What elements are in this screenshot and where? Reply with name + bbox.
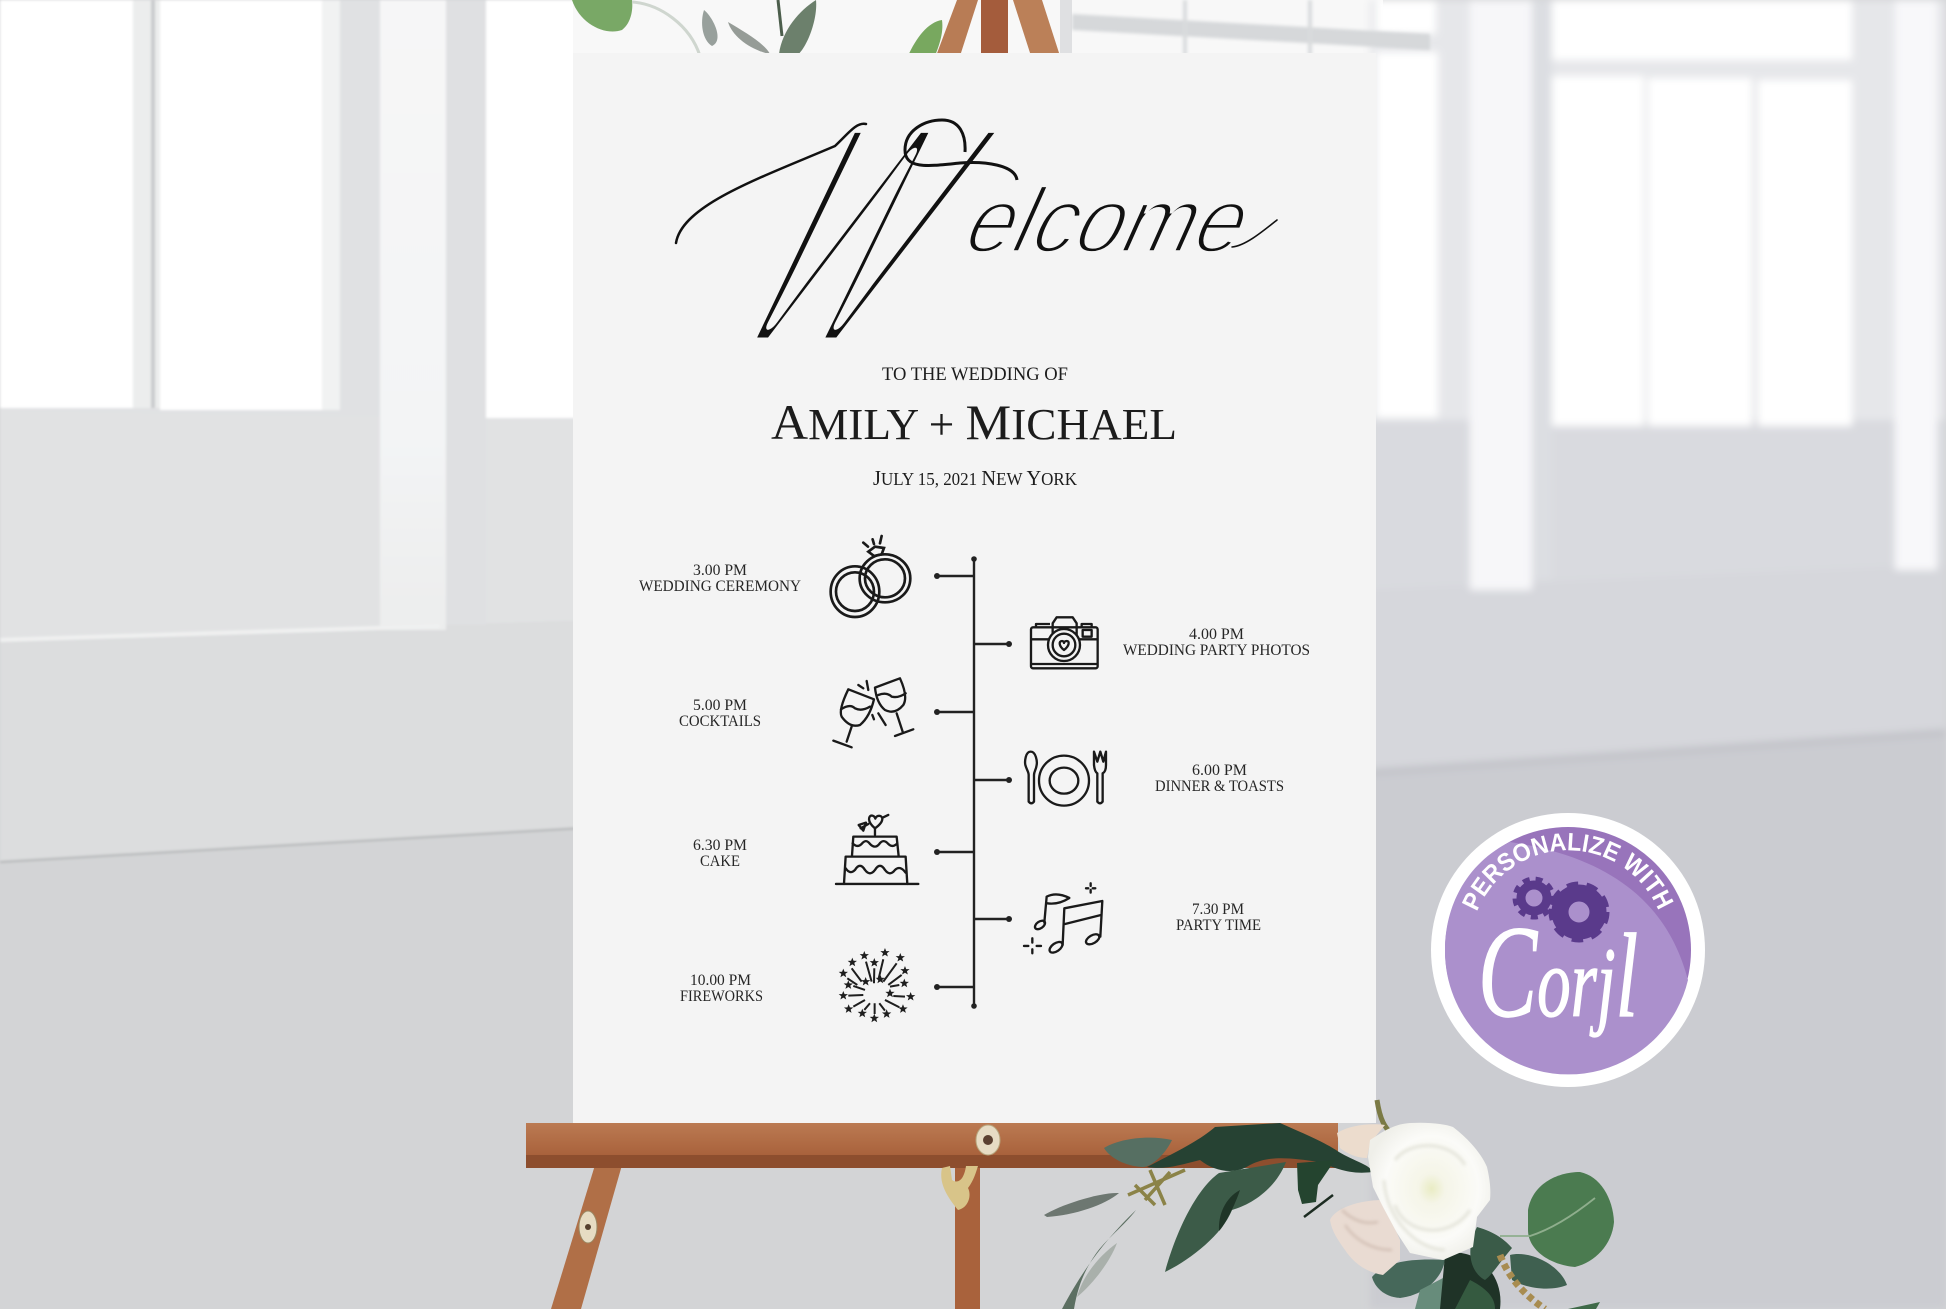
easel ledge and lower legs (526, 1123, 1338, 1309)
thin twig (1304, 1195, 1333, 1217)
event: cocktails: 5.00 PM (693, 697, 747, 714)
dark spray along ledge (1147, 1123, 1372, 1173)
badge disc (1445, 827, 1691, 1073)
event: wedding party photos: 4.00 PM (1189, 626, 1244, 643)
icon: fireworks burst (839, 948, 915, 1022)
script heading: Welcome: W (671, 54, 1052, 417)
arc label (1477, 850, 1659, 912)
event: dinner and toasts: DINNER & TOASTS (1155, 778, 1284, 795)
icon: clinking glasses (833, 678, 913, 747)
icon: music notes (1024, 883, 1102, 955)
gold berries (1500, 1255, 1545, 1309)
event: fireworks: FIREWORKS (680, 988, 763, 1005)
event: wedding ceremony (639, 562, 801, 595)
event: party time (1176, 901, 1261, 934)
floral arrangement (1044, 1100, 1614, 1309)
subheading: TO THE WEDDING OF (882, 365, 1068, 385)
badge: personalize with Corjl (1431, 813, 1705, 1087)
event: cake: CAKE (700, 853, 740, 870)
left leg (551, 1165, 622, 1309)
icon: camera (1031, 617, 1098, 668)
star-shaped sprig (1297, 1160, 1335, 1204)
date and location: JULY 15, 2021 NEW YORK (873, 466, 1077, 490)
event: cocktails: COCKTAILS (679, 713, 761, 730)
background: right window wall (1370, 0, 1946, 1309)
post hook (941, 1166, 978, 1210)
badge: personalize with Corjl: PERSONALIZE WITH (1462, 833, 1674, 910)
eucalyptus leaf (1528, 1172, 1614, 1267)
pink rose: top (1337, 1124, 1385, 1158)
icon: wedding cake (836, 815, 918, 884)
long dark leaf (1165, 1162, 1286, 1272)
lower eucalyptus leaves (1372, 1260, 1445, 1298)
event: wedding party photos (1123, 626, 1310, 659)
background: left window wall (0, 0, 600, 1309)
event: wedding ceremony: 3.00 PM (693, 562, 747, 579)
narrow dark leaf (1219, 1190, 1240, 1231)
script heading: Welcome (671, 54, 1277, 417)
easel top legs (936, 0, 1060, 56)
icon: wedding rings (831, 536, 910, 617)
event: party time: PARTY TIME (1176, 917, 1261, 934)
event: party time: 7.30 PM (1192, 901, 1244, 918)
foliage behind the top of the sign (572, 0, 942, 56)
seed cluster (1128, 1170, 1185, 1205)
large gear (1552, 885, 1606, 939)
leg hardware (579, 1211, 597, 1243)
sign panel (573, 53, 1376, 1123)
badge ring (1431, 813, 1705, 1087)
trailing thin leaves (1062, 1210, 1136, 1309)
script heading: Welcome: elcome (949, 170, 1271, 272)
ledge (526, 1123, 1338, 1155)
stem at sign corner (1377, 1100, 1392, 1134)
grey leaf left (1044, 1193, 1119, 1217)
event: cocktails (679, 697, 761, 730)
pink rose: lower (1330, 1200, 1400, 1275)
event: fireworks: 10.00 PM (690, 972, 751, 989)
event: wedding ceremony: WEDDING CEREMONY (639, 578, 801, 595)
background: slanted mullion behind the easel top (1072, 0, 1430, 56)
event: cake: 6.30 PM (693, 837, 747, 854)
event: wedding party photos: WEDDING PARTY PHOTOS (1123, 642, 1310, 659)
timeline spine and connectors (934, 556, 1012, 1009)
small gear (1515, 879, 1553, 917)
event: fireworks (680, 972, 763, 1005)
grey-green leaf on ledge (1104, 1138, 1172, 1167)
couple names: AMILY + MICHAEL (771, 394, 1177, 450)
background: window strip above the sign (573, 0, 1383, 56)
event: cake (693, 837, 747, 870)
centre post (955, 1160, 980, 1309)
Corjl wordmark: Corjl (1478, 898, 1638, 1045)
white rose (1368, 1123, 1490, 1260)
icon: plate and cutlery (1025, 752, 1106, 806)
event: dinner and toasts (1155, 762, 1284, 795)
ledge clasp (976, 1125, 1000, 1155)
event: dinner and toasts: 6.00 PM (1192, 762, 1247, 779)
